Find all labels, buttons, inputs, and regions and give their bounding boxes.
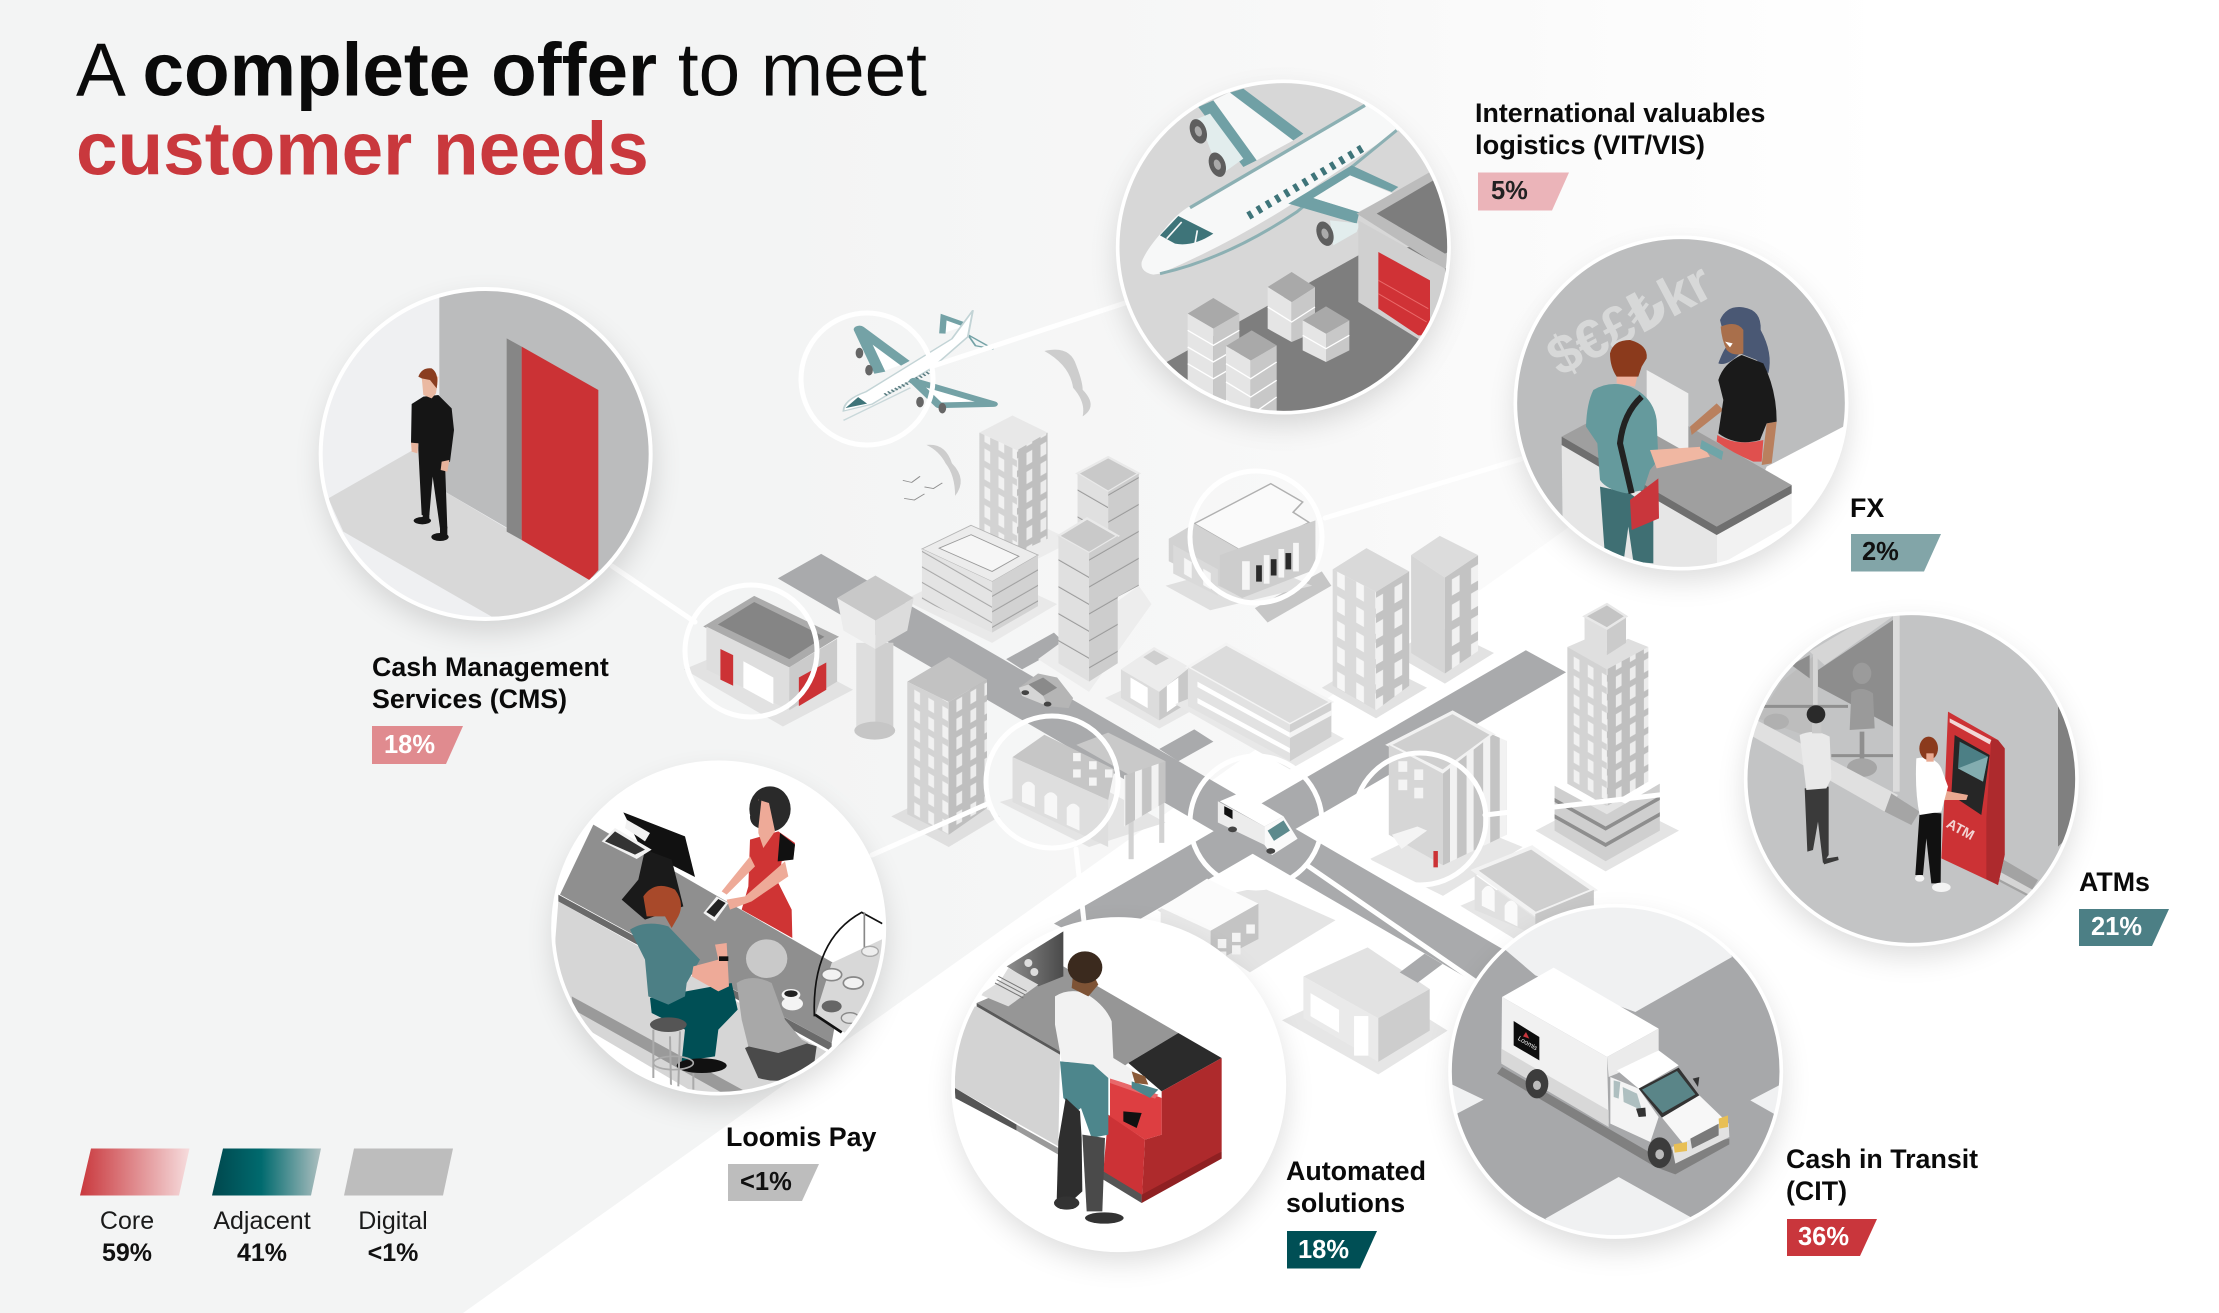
isometric city map — [684, 310, 1679, 1074]
panel: Cash Management Services circle — [310, 280, 660, 631]
car — [1019, 673, 1073, 708]
label: FX — [1850, 493, 1941, 572]
customer at ATM — [1915, 737, 1968, 892]
legend: Core — [100, 1207, 154, 1235]
label: Loomis Pay — [726, 1122, 877, 1201]
hangar — [1356, 172, 1447, 340]
ATM machine — [1941, 712, 2005, 885]
label: Cash in Transit: (CIT) — [1786, 1176, 1847, 1206]
label: Cash in Transit: Cash in Transit — [1786, 1144, 1978, 1174]
security guard — [411, 368, 454, 541]
label: Automated solutions — [1286, 1156, 1426, 1268]
building: long office — [1175, 644, 1344, 769]
building: bank — [1166, 484, 1315, 610]
label: Cash Management Services: Services (CMS) — [372, 684, 567, 714]
connector lines — [612, 303, 1746, 981]
passer-by — [1800, 705, 1839, 864]
airplane small — [843, 310, 993, 420]
storefront — [1758, 612, 2085, 847]
building: cube pavilion — [1282, 947, 1448, 1074]
building: striped office — [1370, 712, 1523, 896]
Loomis logo: Loomis — [1516, 1035, 1539, 1052]
customer — [1586, 340, 1723, 563]
label: Cash Management Services: 18% — [384, 731, 435, 759]
building: wide low block — [904, 525, 1057, 643]
cash cartons — [1188, 272, 1349, 419]
panel: ATMs circle — [1738, 605, 2088, 956]
building: tower front left — [891, 657, 1000, 847]
label: Cash Management Services: Cash Management — [372, 652, 609, 682]
building: cash depot — [684, 596, 853, 727]
cash deposit machine — [1103, 1033, 1222, 1203]
panel: FX circle — [1510, 230, 1860, 580]
teller — [1690, 307, 1777, 465]
legend: <1% — [368, 1239, 418, 1267]
phone — [703, 896, 728, 921]
stool — [650, 1017, 693, 1090]
barista — [722, 786, 795, 938]
cashier — [1054, 951, 1148, 1224]
cafe counter — [552, 825, 845, 1103]
armoured van small — [1218, 792, 1298, 855]
pastry display — [814, 912, 888, 1033]
building: small house — [1105, 647, 1204, 729]
panel: International valuables logistics circle — [1110, 72, 1460, 424]
Loomis logo — [1514, 1021, 1539, 1060]
label: International valuables logistics: International valuables — [1475, 98, 1765, 128]
label: Cash Management Services — [372, 652, 609, 764]
legend: 59% — [102, 1239, 152, 1267]
legend: Digital — [358, 1207, 428, 1235]
vault door — [507, 338, 598, 580]
clouds — [926, 350, 1091, 496]
label: Cash in Transit: 36% — [1798, 1223, 1849, 1251]
label: ATMs — [2079, 867, 2169, 946]
seated older customer — [737, 939, 817, 1081]
ATM machine: ATM — [1944, 815, 1977, 843]
label: Cash in Transit — [1786, 1144, 1978, 1256]
legend: Adjacent — [213, 1207, 311, 1235]
POS terminal — [602, 812, 695, 920]
label: FX: FX — [1850, 493, 1884, 523]
label: Loomis Pay: Loomis Pay — [726, 1122, 877, 1152]
label: Automated solutions: solutions — [1286, 1188, 1405, 1218]
sales counter — [955, 931, 1178, 1155]
label: Automated solutions: Automated — [1286, 1156, 1426, 1186]
building: tall tower rear — [955, 416, 1073, 569]
locator rings — [685, 313, 1486, 888]
title: A complete offer to meet — [76, 28, 927, 112]
legend: 41% — [237, 1239, 287, 1267]
building: stepped towers — [1038, 457, 1152, 692]
building: tall tower right — [1535, 604, 1679, 871]
currency symbols: $€£₺kr — [1537, 250, 1722, 388]
roads — [778, 554, 1566, 1004]
pavement kerb — [1753, 720, 2038, 897]
seated customer — [630, 886, 738, 1090]
label: Loomis Pay: <1% — [740, 1168, 792, 1196]
label: ATMs: 21% — [2091, 913, 2142, 941]
panel: Loomis Pay circle — [545, 753, 895, 1106]
label: FX: 2% — [1862, 538, 1899, 566]
building: arched hall — [1000, 733, 1166, 859]
label: International valuables logistics: logistics (VIT/VIS) — [1475, 130, 1705, 160]
label: International valuables logistics: 5% — [1491, 177, 1528, 205]
building: twin residential towers — [1322, 536, 1494, 718]
panel: Cash in Transit circle — [1442, 897, 1792, 1249]
label: International valuables logistics — [1475, 98, 1765, 210]
cash truck — [1497, 968, 1729, 1174]
panel: Automated solutions circle — [945, 908, 1295, 1261]
coffee cup — [782, 989, 803, 1010]
building: white roof block — [1157, 879, 1336, 972]
building: control tower — [837, 576, 914, 740]
counter — [1562, 370, 1792, 580]
legend — [80, 1148, 453, 1267]
birds — [903, 476, 942, 500]
building: arched corner block — [1460, 847, 1600, 947]
title: customer needs — [76, 106, 649, 190]
cargo plane — [1141, 85, 1410, 275]
label: ATMs: ATMs — [2079, 867, 2150, 897]
label: Automated solutions: 18% — [1298, 1236, 1349, 1264]
